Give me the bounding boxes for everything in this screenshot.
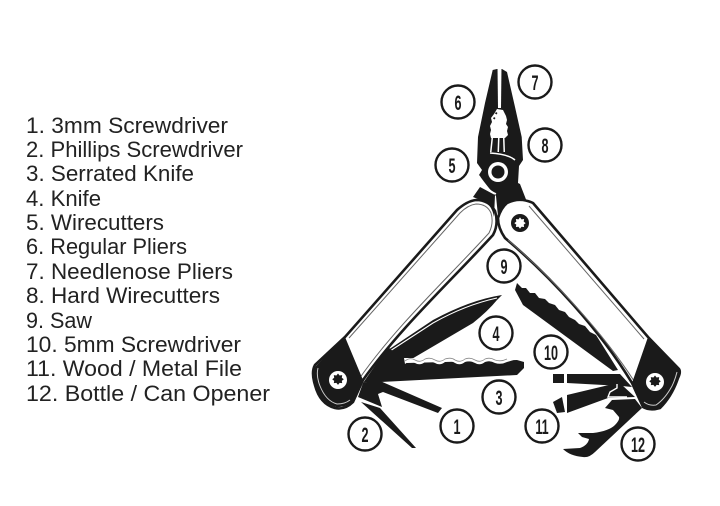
icon: right screw bbox=[646, 373, 664, 391]
callout 1: 1 bbox=[453, 415, 461, 439]
pliers head bbox=[473, 67, 527, 217]
icon: top screw bbox=[511, 214, 529, 232]
right handle bbox=[498, 200, 680, 409]
legend list: 11. Wood / Metal File bbox=[26, 356, 242, 381]
callout 10 bbox=[534, 336, 568, 368]
callout 5: 5 bbox=[448, 154, 456, 178]
callout 4: 4 bbox=[492, 322, 500, 346]
tool: serrated knife bbox=[363, 347, 524, 383]
number callouts bbox=[348, 66, 654, 460]
tool: knife bbox=[372, 295, 502, 372]
legend list: 12. Bottle / Can Opener bbox=[26, 381, 270, 406]
callout 10: 10 bbox=[544, 341, 558, 365]
tool: 5mm screwdriver bbox=[553, 374, 632, 387]
callout 6 bbox=[442, 86, 474, 118]
callout 4 bbox=[480, 316, 512, 350]
serrated grip bbox=[490, 109, 508, 138]
callout 11 bbox=[526, 410, 558, 442]
tool: file bbox=[553, 384, 635, 413]
callout 11: 11 bbox=[535, 415, 549, 439]
legend list: 2. Phillips Screwdriver bbox=[26, 137, 243, 162]
left handle black end bbox=[314, 337, 363, 407]
callout 3: 3 bbox=[495, 386, 503, 410]
callout 2 bbox=[348, 418, 382, 450]
tool: 3mm screwdriver bbox=[358, 381, 442, 413]
pivot bbox=[488, 162, 508, 182]
legend list bbox=[26, 113, 270, 406]
legend list: 8. Hard Wirecutters bbox=[26, 283, 220, 308]
legend list: 9. Saw bbox=[26, 308, 92, 333]
tool: bottle opener bbox=[563, 399, 642, 457]
icon: left screw bbox=[329, 371, 347, 389]
right handle black end bbox=[632, 337, 680, 408]
legend list: 5. Wirecutters bbox=[26, 210, 164, 235]
callout 12: 12 bbox=[631, 433, 645, 457]
jaw slit bbox=[498, 67, 502, 108]
callout 9 bbox=[488, 250, 520, 282]
callout 3 bbox=[482, 380, 516, 414]
callout 12 bbox=[622, 428, 654, 460]
legend list: 1. 3mm Screwdriver bbox=[26, 113, 228, 138]
callout 8: 8 bbox=[541, 134, 549, 158]
legend list: 6. Regular Pliers bbox=[26, 234, 187, 259]
grip slots bbox=[490, 138, 505, 152]
tool: phillips screwdriver bbox=[361, 402, 416, 448]
legend list: 10. 5mm Screwdriver bbox=[26, 332, 241, 357]
legend list: 7. Needlenose Pliers bbox=[26, 259, 233, 284]
tool: saw bbox=[515, 283, 618, 371]
legend list: 4. Knife bbox=[26, 186, 101, 211]
callout 1 bbox=[440, 410, 474, 442]
callout 7 bbox=[518, 66, 552, 98]
callout 5 bbox=[436, 148, 468, 182]
callout 8 bbox=[528, 128, 562, 162]
callout 2: 2 bbox=[361, 423, 369, 447]
callout 9: 9 bbox=[500, 255, 508, 279]
callout 6: 6 bbox=[454, 91, 462, 115]
callout 7: 7 bbox=[531, 71, 539, 95]
legend list: 3. Serrated Knife bbox=[26, 161, 194, 186]
left handle bbox=[313, 200, 497, 408]
left lever bbox=[473, 187, 495, 217]
